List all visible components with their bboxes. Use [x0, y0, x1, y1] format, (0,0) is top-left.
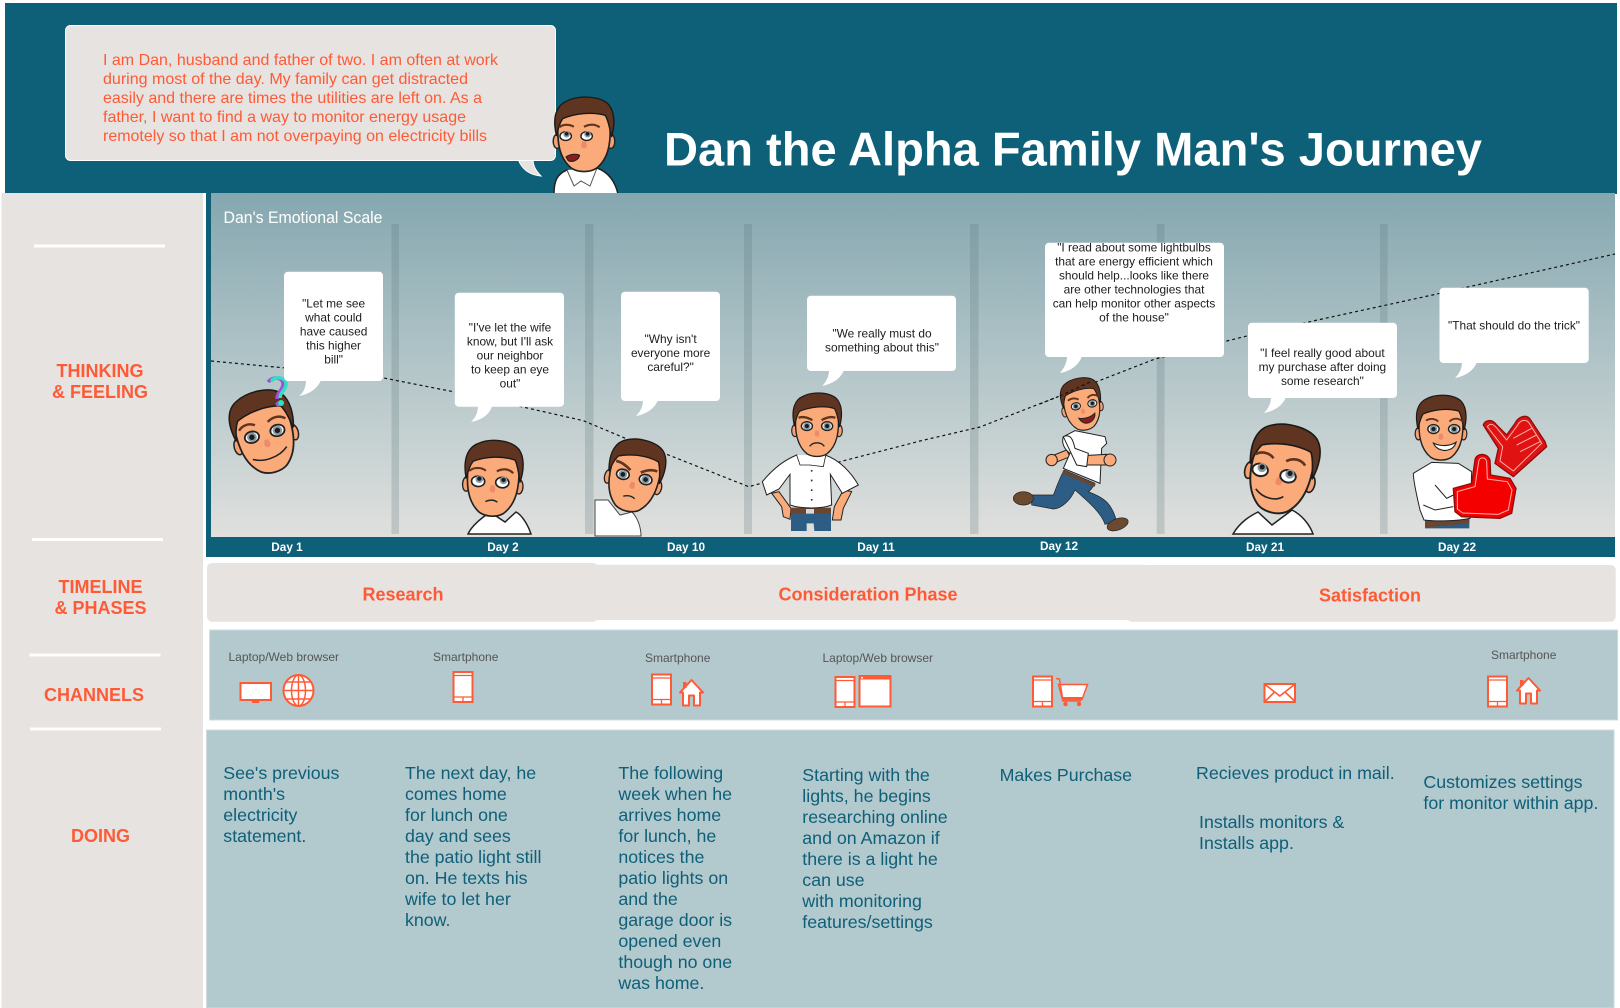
timeline bar [206, 537, 1615, 557]
row label: timeline and phases: TIMELINE [58, 577, 142, 597]
row label: channels: CHANNELS [44, 685, 144, 705]
doing: day 10 text: notices the [618, 847, 705, 867]
speech bubble: Day 12 [1045, 241, 1224, 373]
icon: phone 2 [652, 674, 671, 704]
speech bubble: Day 21: "I feel really good about [1260, 346, 1385, 360]
character: Dan in header [553, 97, 618, 194]
doing: day 10 text: arrives home [618, 805, 721, 825]
doing: day 2 text: comes home [405, 784, 507, 804]
icon: house 2 [1517, 678, 1540, 704]
speech bubble: Day 11: something about this" [825, 341, 939, 355]
day labels: Day 11 [857, 540, 895, 554]
speech bubble: Day 2: our neighbor [477, 349, 543, 363]
doing: day 2 text: the patio light still [405, 847, 541, 867]
doing: day 11 text: features/settings [802, 912, 933, 932]
day labels: Day 22 [1438, 540, 1476, 554]
doing: day 11 text: there is a light he [802, 849, 938, 869]
panel: channels [210, 630, 1618, 720]
panel: doing [206, 730, 1614, 1008]
persona text: father, I want to find a way to monitor energy usage [103, 109, 466, 126]
speech bubble: Day 12: can help monitor other aspects [1053, 297, 1215, 311]
doing: day 10 text: for lunch, he [618, 826, 716, 846]
persona text: during most of the day. My family can get distracted [103, 71, 468, 88]
title: Dan the Alpha Family Man's Journey [664, 122, 1482, 176]
front foam hand [1453, 454, 1516, 518]
speech bubble: Day 12: should help...looks like there [1059, 269, 1209, 283]
phase: satisfaction [1127, 565, 1616, 622]
row label: doing: DOING [71, 826, 130, 846]
doing: day 10 text: though no one [618, 952, 732, 972]
speech bubble: Day 21: some research" [1281, 374, 1364, 388]
character: Day 12 running [1013, 375, 1130, 533]
doing: day 2 text: The next day, he [405, 763, 536, 783]
speech bubble: Day 1: have caused [300, 325, 367, 339]
doing: day 10 text: The following [618, 763, 723, 783]
character: Day 2 looking up [461, 439, 531, 534]
doing: day 11 text: lights, he begins [802, 786, 931, 806]
icon: monitor [240, 683, 271, 703]
icon: browser window [860, 676, 890, 706]
phase: research: Research [362, 584, 444, 604]
day labels: Day 1 [271, 540, 303, 554]
speech bubble: Day 21: my purchase after doing [1259, 360, 1386, 374]
doing: day 10 text: opened even [618, 931, 721, 951]
icon: house 1 [680, 680, 703, 706]
row label: thinking and feeling: & FEELING [52, 382, 148, 402]
speech bubble: Day 2: know, but I'll ask [467, 335, 553, 349]
speech bubble: Day 1: what could [304, 311, 362, 325]
doing: day 2 text: wife to let her [404, 889, 511, 909]
icon: envelope [1264, 684, 1295, 702]
row label: timeline and phases: & PHASES [54, 598, 147, 618]
icon: phone 1 [454, 672, 472, 702]
emotional scale heading: Dan's Emotional Scale [224, 209, 382, 227]
persona speech bubble [66, 26, 556, 176]
left sidebar [2, 193, 203, 1008]
channel labels [228, 648, 1557, 665]
speech bubble: Day 1 [284, 272, 383, 396]
doing: day 10 text: garage door is [618, 910, 732, 930]
icon: shopping cart [1056, 678, 1088, 706]
character: Day 21 content [1233, 417, 1327, 534]
speech bubble: Day 12: are other technologies that [1064, 283, 1205, 297]
speech bubble: Day 10: careful?" [647, 360, 694, 374]
phase: research [207, 563, 598, 622]
doing: day 1 text: electricity [223, 805, 298, 825]
speech bubble: Day 2: to keep an eye [471, 363, 549, 377]
emotion curve [211, 254, 1615, 487]
row label: thinking and feeling: THINKING [56, 361, 144, 381]
doing: day 12 text: Makes Purchase [1000, 765, 1132, 785]
character: Day 1 head with question mark [222, 378, 307, 481]
phase: satisfaction: Satisfaction [1319, 586, 1421, 606]
speech bubble: Day 21 [1248, 323, 1397, 413]
day labels: Day 2 [487, 540, 519, 554]
doing: mail text: Recieves product in mail. [1196, 763, 1395, 783]
speech bubble: Day 12: "I read about some lightbulbs [1057, 241, 1211, 255]
channel labels: Smartphone [645, 651, 711, 665]
day labels: Day 21 [1246, 540, 1284, 554]
speech bubble: Day 10 [621, 292, 720, 416]
icon: phone 3 [836, 677, 854, 707]
speech bubble: Day 1: bill" [324, 353, 343, 367]
doing: day 2 text: for lunch one [405, 805, 508, 825]
doing: day 10 text: was home. [617, 973, 704, 993]
header band [5, 3, 1617, 194]
speech bubble: Day 2: "I've let the wife [469, 321, 552, 335]
doing: day 22 text: for monitor within app. [1423, 793, 1598, 813]
doing: day 2 text: know. [405, 910, 450, 930]
doing: day 2 text: day and sees [405, 826, 511, 846]
doing: day 1 text: statement. [223, 826, 306, 846]
speech bubble: Day 22: "That should do the trick" [1448, 319, 1580, 333]
speech bubble: Day 1: this higher [306, 339, 361, 353]
doing: day 11 text: can use [802, 870, 865, 890]
speech bubble: Day 11: "We really must do [832, 327, 932, 341]
speech bubble: Day 2: out" [500, 377, 520, 391]
speech bubble: Day 22 [1440, 288, 1589, 378]
speech bubble: Day 1: "Let me see [302, 297, 366, 311]
character: Day 10 annoyed [595, 433, 671, 536]
speech bubble: Day 12: that are energy efficient which [1055, 255, 1213, 269]
character: Day 11 standing sad [762, 393, 858, 531]
icon: globe [284, 675, 314, 706]
doing: day 11 text: researching online [802, 807, 948, 827]
doing: day 10 text: and the [618, 889, 678, 909]
back foam hand [1483, 416, 1547, 477]
day labels: Day 12 [1040, 539, 1078, 553]
doing: day 1 text: month's [223, 784, 285, 804]
day labels [271, 539, 1476, 554]
panel: emotional scale [206, 193, 1615, 557]
character: Day 22 with foam thumbs [1413, 395, 1547, 528]
channel labels: Laptop/Web browser [228, 650, 339, 664]
persona text [103, 52, 499, 145]
doing: install text: Installs monitors & [1199, 812, 1344, 832]
icon: phone 5 [1488, 676, 1507, 706]
doing: day 2 text: on. He texts his [405, 868, 528, 888]
phase: consideration: Consideration Phase [778, 584, 958, 604]
phase: consideration [590, 565, 1148, 620]
doing: day 10 text: week when he [617, 784, 732, 804]
channel labels: Laptop/Web browser [822, 651, 933, 665]
speech bubble: Day 2 [455, 293, 564, 422]
persona text: easily and there are times the utilities are left on. As a [103, 90, 482, 107]
channel labels: Smartphone [1491, 648, 1557, 662]
icon: phone 4 [1033, 676, 1052, 706]
speech bubble: Day 10: "Why isn't [645, 332, 697, 346]
channel labels: Smartphone [433, 650, 499, 664]
day labels: Day 10 [667, 540, 705, 554]
doing: day 22 text: Customizes settings [1423, 772, 1583, 792]
persona text: remotely so that I am not overpaying on electricity bills [103, 128, 487, 145]
doing: day 10 text: patio lights on [618, 868, 728, 888]
doing: day 11 text: and on Amazon if [802, 828, 940, 848]
doing: day 11 text: with monitoring [801, 891, 922, 911]
doing: install text: Installs app. [1199, 833, 1294, 853]
persona text: I am Dan, husband and father of two. I am often at work [103, 52, 499, 69]
doing: day 11 text: Starting with the [802, 765, 930, 785]
doing: day 1 text: See's previous [223, 763, 339, 783]
speech bubble: Day 10: everyone more [631, 346, 711, 360]
speech bubble: Day 12: of the house" [1099, 311, 1169, 325]
speech bubble: Day 11 [807, 296, 956, 386]
